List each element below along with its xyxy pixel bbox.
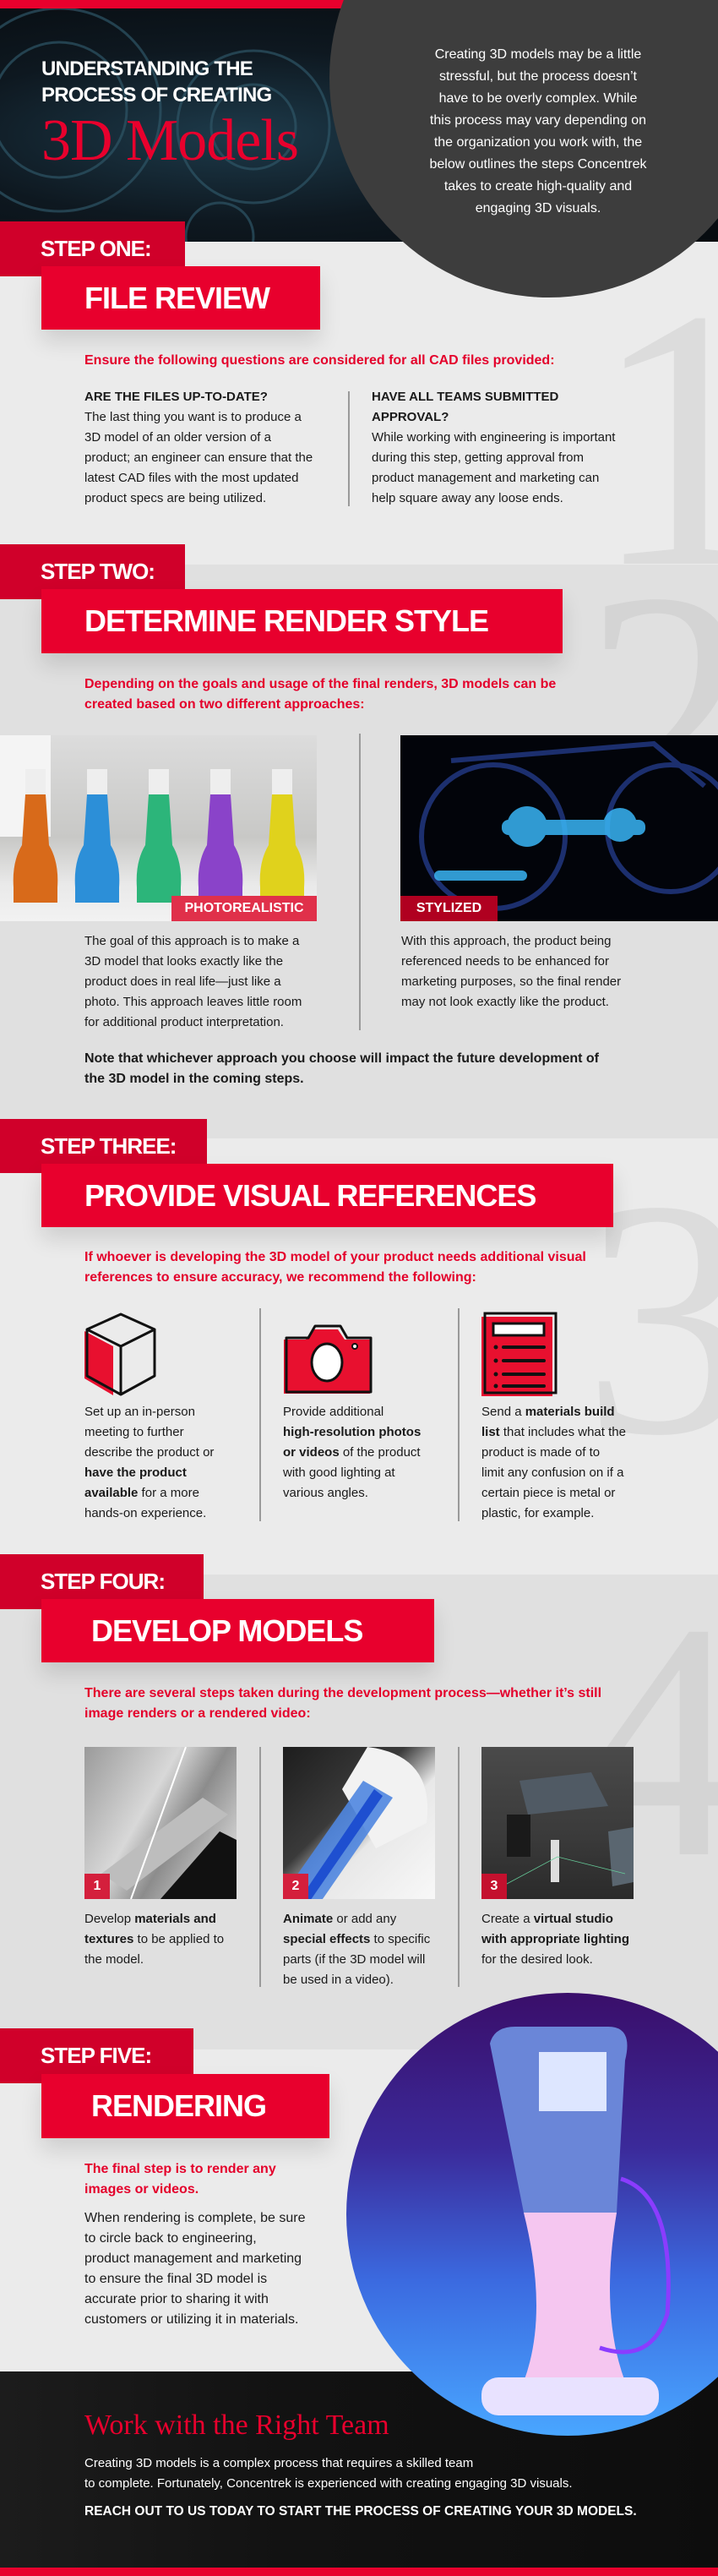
title: 3D Models [41,108,298,173]
photorealistic text: photo. This approach leaves little room [84,995,302,1009]
step five text: product management and marketing [84,2251,302,2266]
step one intro: Ensure the following questions are considered for all CAD files provided: [84,353,555,368]
step four text 3: for the desired look. [481,1952,593,1967]
step five intro: The final step is to render any [84,2162,276,2176]
stylized text: marketing purposes, so the final render [401,974,621,989]
photorealistic text [84,934,302,1029]
image 2: animate [283,1747,435,1899]
step three text 1: describe the product or [84,1445,214,1460]
footer call to action: REACH OUT TO US TODAY TO START THE PROCESS OF CREATING YOUR 3D MODELS. [84,2504,637,2519]
step three text 2: with good lighting at [283,1465,395,1480]
step three text 1 [84,1405,215,1520]
step one left column [84,390,313,505]
image 1: materials: 1 [94,1879,101,1893]
icon: document list [481,1312,558,1396]
step two intro [84,677,556,712]
step one left column: product; an engineer can ensure that the [84,450,313,465]
note [84,1051,599,1086]
label: photorealistic [171,896,317,921]
step four text 3: with appropriate lighting [481,1932,629,1946]
stylized text [401,934,621,1009]
step five title: RENDERING [91,2088,266,2123]
step three text 1: Set up an in-person [84,1405,195,1419]
step five text: When rendering is complete, be sure [84,2211,305,2225]
step five text: to circle back to engineering, [84,2231,257,2246]
step one label: STEP ONE: [41,236,151,261]
step three text 2: Provide additional [283,1405,383,1419]
step three title: PROVIDE VISUAL REFERENCES [84,1178,536,1213]
step one right column: While working with engineering is important [372,430,615,445]
step four text 2: Animate or add any [283,1912,396,1926]
intro text: the organization you work with, the [434,135,642,150]
step one right column: during this step, getting approval from [372,450,584,465]
intro text: below outlines the steps Concentrek [429,157,647,172]
step two intro: created based on two different approaches: [84,697,365,712]
step three text 3: certain piece is metal or [481,1486,615,1500]
step three text 1: meeting to further [84,1425,184,1439]
step five intro [84,2162,276,2196]
image 2: animate: 2 [292,1879,299,1893]
stylized text: referenced needs to be enhanced for [401,954,609,969]
intro text: stressful, but the process doesn’t [439,69,637,84]
step three title [41,1164,613,1227]
step three intro: references to ensure accuracy, we recommend the following: [84,1270,476,1285]
label: stylized [400,896,498,921]
intro text: have to be overly complex. While [439,91,637,106]
step five title [41,2074,329,2138]
step one label [0,221,185,276]
label: photorealistic: PHOTOREALISTIC [184,901,304,915]
footer text: to complete. Fortunately, Concentrek is experienced with creating engaging 3D visuals. [84,2476,573,2491]
title: PROCESS OF CREATING [41,84,271,106]
step four title: DEVELOP MODELS [91,1613,362,1648]
step three intro: If whoever is developing the 3D model of your product needs additional visual [84,1250,586,1264]
step four intro [84,1686,601,1721]
step four intro: image renders or a rendered video: [84,1706,311,1721]
step two title: DETERMINE RENDER STYLE [84,603,488,638]
step one title: FILE REVIEW [84,281,269,315]
footer text [84,2456,573,2491]
step one left column: ARE THE FILES UP-TO-DATE? [84,390,268,404]
step four text 1: Develop materials and [84,1912,216,1926]
intro text [429,47,647,216]
step three text 2: high-resolution photos [283,1425,421,1439]
footer text: Creating 3D models is a complex process that requires a skilled team [84,2456,473,2470]
step one title [41,266,320,330]
footer title: Work with the Right Team [84,2410,389,2441]
rendering circle image [346,1993,718,2436]
intro text: this process may vary depending on [430,113,646,128]
step three label [0,1119,207,1173]
step one right column: APPROVAL? [372,410,449,424]
note: the 3D model in the coming steps. [84,1072,304,1086]
bottom red bar [0,2568,718,2576]
step four text 2 [283,1912,430,1987]
step three text 3: list that includes what the [481,1425,626,1439]
step four text 1: the model. [84,1952,144,1967]
title [41,57,298,173]
title: UNDERSTANDING THE [41,57,253,80]
label: stylized: STYLIZED [416,901,481,915]
step two label [0,544,185,599]
step three text 2: various angles. [283,1486,368,1500]
step five text: customers or utilizing it in materials. [84,2312,298,2327]
photorealistic text: The goal of this approach is to make a [84,934,299,948]
step three text 1: available for a more [84,1486,199,1500]
stylized text: With this approach, the product being [401,934,611,948]
photorealistic text: product does in real life—just like a [84,974,281,989]
step one right column: help square away any loose ends. [372,491,563,505]
step four title [41,1599,434,1662]
step four text 2: special effects to specific [283,1932,430,1946]
step three text 3: limit any confusion on if a [481,1465,623,1480]
step three text 2: or videos of the product [283,1445,421,1460]
step one left column: product specs are being utilized. [84,491,266,505]
step four label [0,1554,204,1609]
step five text: to ensure the final 3D model is [84,2272,267,2286]
image 1: materials [84,1747,237,1899]
image 3: virtual studio: 3 [491,1879,498,1893]
icon: camera [284,1325,372,1394]
step one right column: HAVE ALL TEAMS SUBMITTED [372,390,558,404]
stylized text: may not look exactly like the product. [401,995,609,1009]
step three text 3: plastic, for example. [481,1506,594,1520]
header circle [329,0,718,297]
header [0,0,718,242]
step four text 2: parts (if the 3D model will [283,1952,425,1967]
footer background [0,2371,718,2568]
image: photorealistic [0,735,317,921]
step four label: STEP FOUR: [41,1569,165,1594]
step four text 2: be used in a video). [283,1973,394,1987]
step three text 3 [481,1405,626,1520]
step five label: STEP FIVE: [41,2043,151,2068]
step three text 1: have the product [84,1465,187,1480]
step three label: STEP THREE: [41,1133,176,1159]
image: stylized [400,735,718,921]
step two label: STEP TWO: [41,559,155,584]
intro text: engaging 3D visuals. [476,201,601,216]
step four intro: There are several steps taken during the development process—whether it’s still [84,1686,601,1700]
step one left column: 3D model of an older version of a [84,430,271,445]
step three text 2 [283,1405,421,1500]
step two title [41,589,563,653]
step three intro [84,1250,586,1285]
step one right column [372,390,615,505]
step four text 1: textures to be applied to [84,1932,224,1946]
step four text 3 [481,1912,629,1967]
intro text: Creating 3D models may be a little [435,47,641,62]
step two intro: Depending on the goals and usage of the final renders, 3D models can be [84,677,556,691]
top red bar [0,0,718,8]
step one left column: latest CAD files with the most updated [84,471,298,485]
photorealistic text: 3D model that looks exactly like the [84,954,283,969]
step five intro: images or videos. [84,2182,199,2196]
step four text 1 [84,1912,224,1967]
photorealistic text: for additional product interpretation. [84,1015,284,1029]
intro text: takes to create high-quality and [444,179,632,194]
image 3: virtual studio [481,1747,634,1899]
step three text 3: product is made of to [481,1445,600,1460]
step five text: accurate prior to sharing it with [84,2292,269,2306]
step four text 3: Create a virtual studio [481,1912,613,1926]
step three text 1: hands-on experience. [84,1506,206,1520]
step one left column: The last thing you want is to produce a [84,410,302,424]
step three text 3: Send a materials build [481,1405,615,1419]
icon: header gear graphics [0,8,331,242]
icon: cube [84,1313,156,1396]
step five text [84,2211,305,2327]
step five label [0,2028,193,2083]
step one right column: product management and marketing can [372,471,599,485]
note: Note that whichever approach you choose will impact the future development of [84,1051,599,1066]
